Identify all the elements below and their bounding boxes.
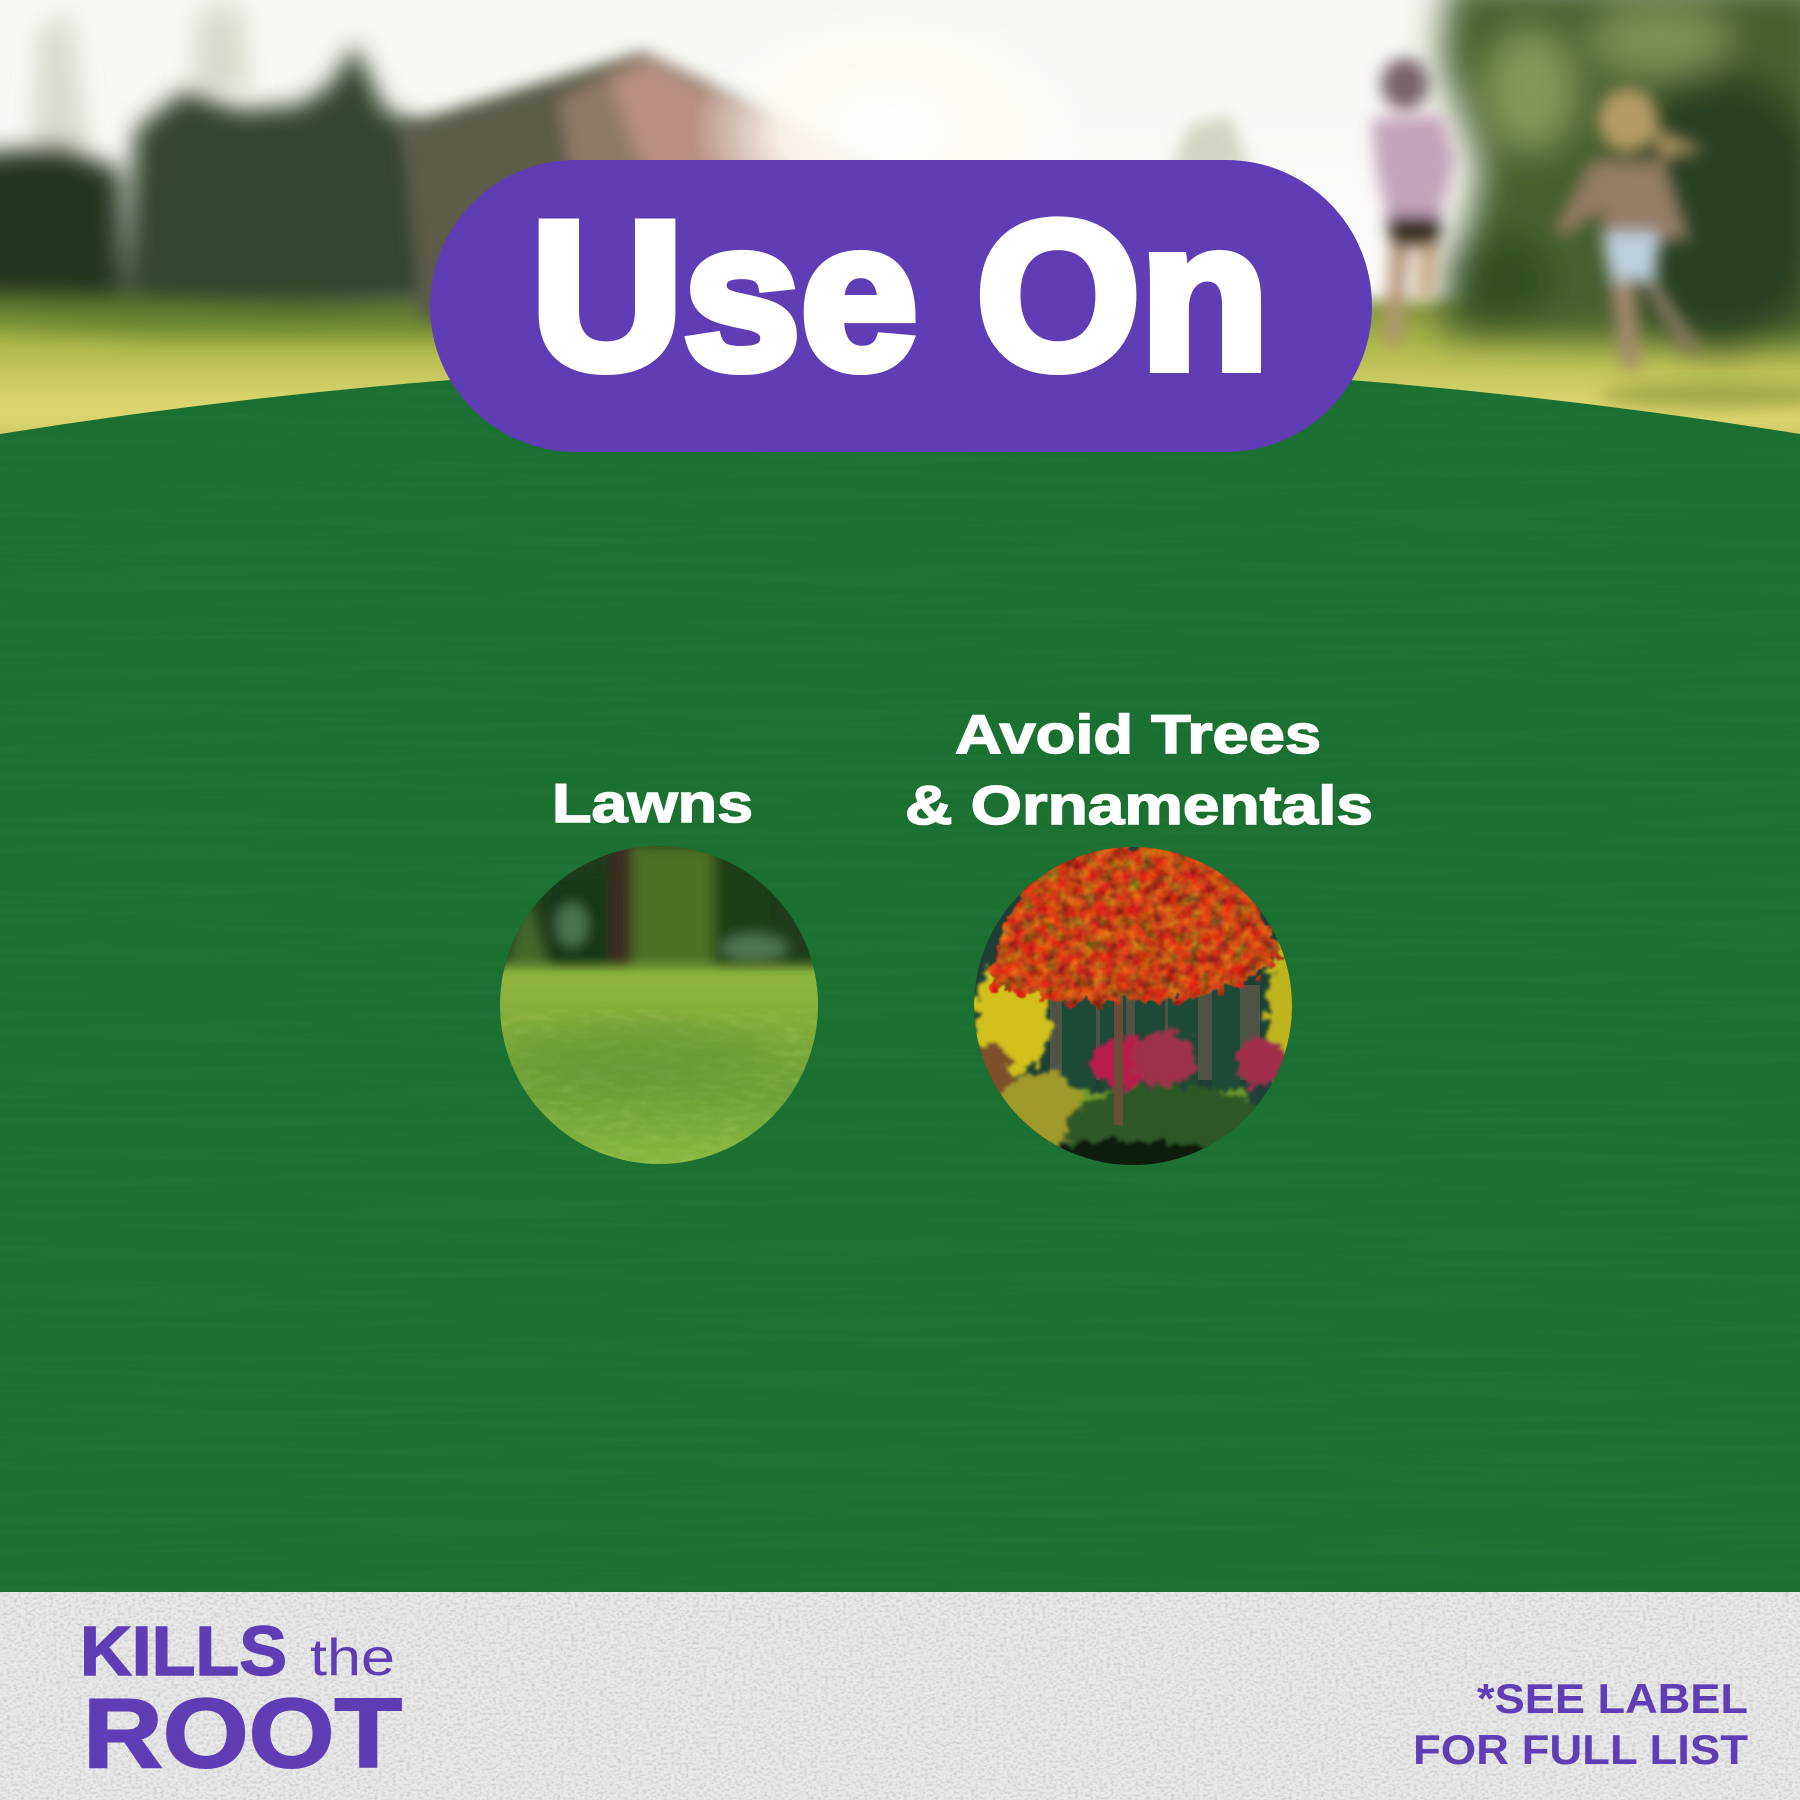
background photo: children running on a lawn at sunset xyxy=(0,0,1800,470)
brand mark: kills the root xyxy=(80,1612,402,1788)
tree photo circle xyxy=(974,847,1292,1165)
child in diaper xyxy=(1556,88,1705,368)
headline pill xyxy=(430,160,1372,452)
distant faint tree xyxy=(1170,115,1250,170)
ornamentals label: & Ornamentals xyxy=(905,774,1373,836)
grass field xyxy=(0,286,1800,434)
footnote: see label: *SEE LABEL xyxy=(1477,1675,1748,1722)
blurred trees on the right xyxy=(1440,0,1800,350)
blurred trees on the left xyxy=(0,5,470,335)
headline text: Use On xyxy=(531,178,1269,413)
lawns column xyxy=(500,784,818,1164)
blurred house xyxy=(400,52,880,320)
brand mark: kills the root: the xyxy=(310,1629,395,1687)
sun glow xyxy=(696,84,900,160)
brand mark: kills the root: KILLS xyxy=(80,1612,287,1690)
trees label: Avoid Trees xyxy=(955,703,1321,765)
trees and ornamentals column xyxy=(905,703,1373,1196)
green curved panel xyxy=(0,380,1800,450)
lawns label: Lawns xyxy=(552,772,753,834)
footnote: see label: FOR FULL LIST xyxy=(1413,1726,1748,1773)
child in pink shirt xyxy=(1372,58,1456,345)
dark grass shadow on the right xyxy=(1600,381,1800,409)
bottom plaster band xyxy=(0,1592,1800,1800)
lawn photo circle xyxy=(500,846,818,1164)
footnote: see label xyxy=(1413,1675,1748,1773)
brand mark: kills the root: ROOT xyxy=(83,1678,402,1788)
